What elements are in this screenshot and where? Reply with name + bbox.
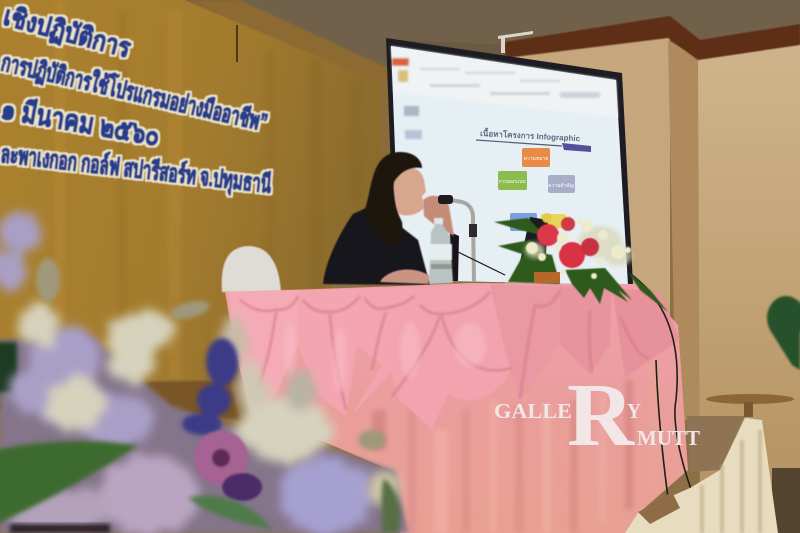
pot [534,272,560,283]
banner line 3: ๑ มีนาคม ๒๕๖๐ [0,93,162,153]
yellow flow box [541,214,566,228]
jacket sleeve [448,232,459,281]
grey flow box [548,175,575,193]
banner line 4: ละพาเงกอก กอล์ฟ สปารีสอร์ท จ.ปทุมธานี [0,139,273,201]
slide title and line: เนื้อหาโครงการ Infographic [480,127,581,143]
ribbon toolbar [391,46,618,139]
vertical pleats [372,360,659,533]
dusky base under blossoms [0,335,408,533]
white flower haze [525,226,632,266]
projector mount [498,31,533,53]
orange flow box: ความหมาย [524,156,548,162]
blue delphinium stalk [182,338,238,435]
ceiling [0,0,800,75]
curtain backdrop [0,0,395,420]
fern leaves [494,218,668,312]
face [392,167,426,215]
dark cables on skirt [632,275,712,533]
jacket [323,208,430,285]
cream blossoms [22,301,401,508]
watermark word MUTT: MUTT [637,426,700,450]
speaker [323,152,459,285]
watermark large R: R [567,366,635,465]
lavender blossoms [0,212,373,533]
screen surface [391,46,628,285]
wooden ceiling trim [505,16,800,60]
orange flow box [522,148,550,167]
pink draped table skirt [225,283,688,533]
dark device behind flowers [520,217,548,272]
banner line 1: เชิงปฏิบัติการ [0,1,134,64]
microphone stand [438,195,505,282]
baby's breath [526,218,631,279]
green flow box [498,171,527,190]
small side table [706,394,794,417]
yellow blossoms [542,213,552,223]
blue flow box [510,213,537,231]
table flower arrangement [494,213,668,312]
grey flow box: ความสำคัญ [548,183,574,189]
red carnations [537,217,599,268]
watermark letter Y: Y [627,399,641,423]
green flow box: การออกแบบ [498,179,526,185]
lower hand [380,269,430,284]
grey-green stalks [36,258,386,450]
slide title and line [476,127,591,152]
watermark: Gallery RMUTT [494,366,700,465]
water bottle [429,218,453,284]
watermark word GALLE: GALLE [494,399,572,423]
white table cloth, right table [625,416,778,533]
dark green at left [0,342,17,392]
white chair [222,246,281,292]
screen frame [386,38,633,285]
foreground flower bouquet, out of focus [0,212,408,533]
raised hand [423,196,454,236]
green leaves [0,441,400,533]
projection screen [386,38,633,285]
swag highlights [284,322,486,392]
dark ground strip [10,524,110,533]
potted plant at right [767,296,800,370]
banner line 2: การปฏิบัติการใช้โปรแกรมอย่างมืออาชีพ” [0,47,270,137]
hair [364,152,422,246]
banner: Thai lettering on curtain [0,1,273,201]
purple bloom [194,431,262,501]
right wall panels [505,30,800,533]
swag fold lines [240,290,650,410]
fabric swags [228,284,680,430]
